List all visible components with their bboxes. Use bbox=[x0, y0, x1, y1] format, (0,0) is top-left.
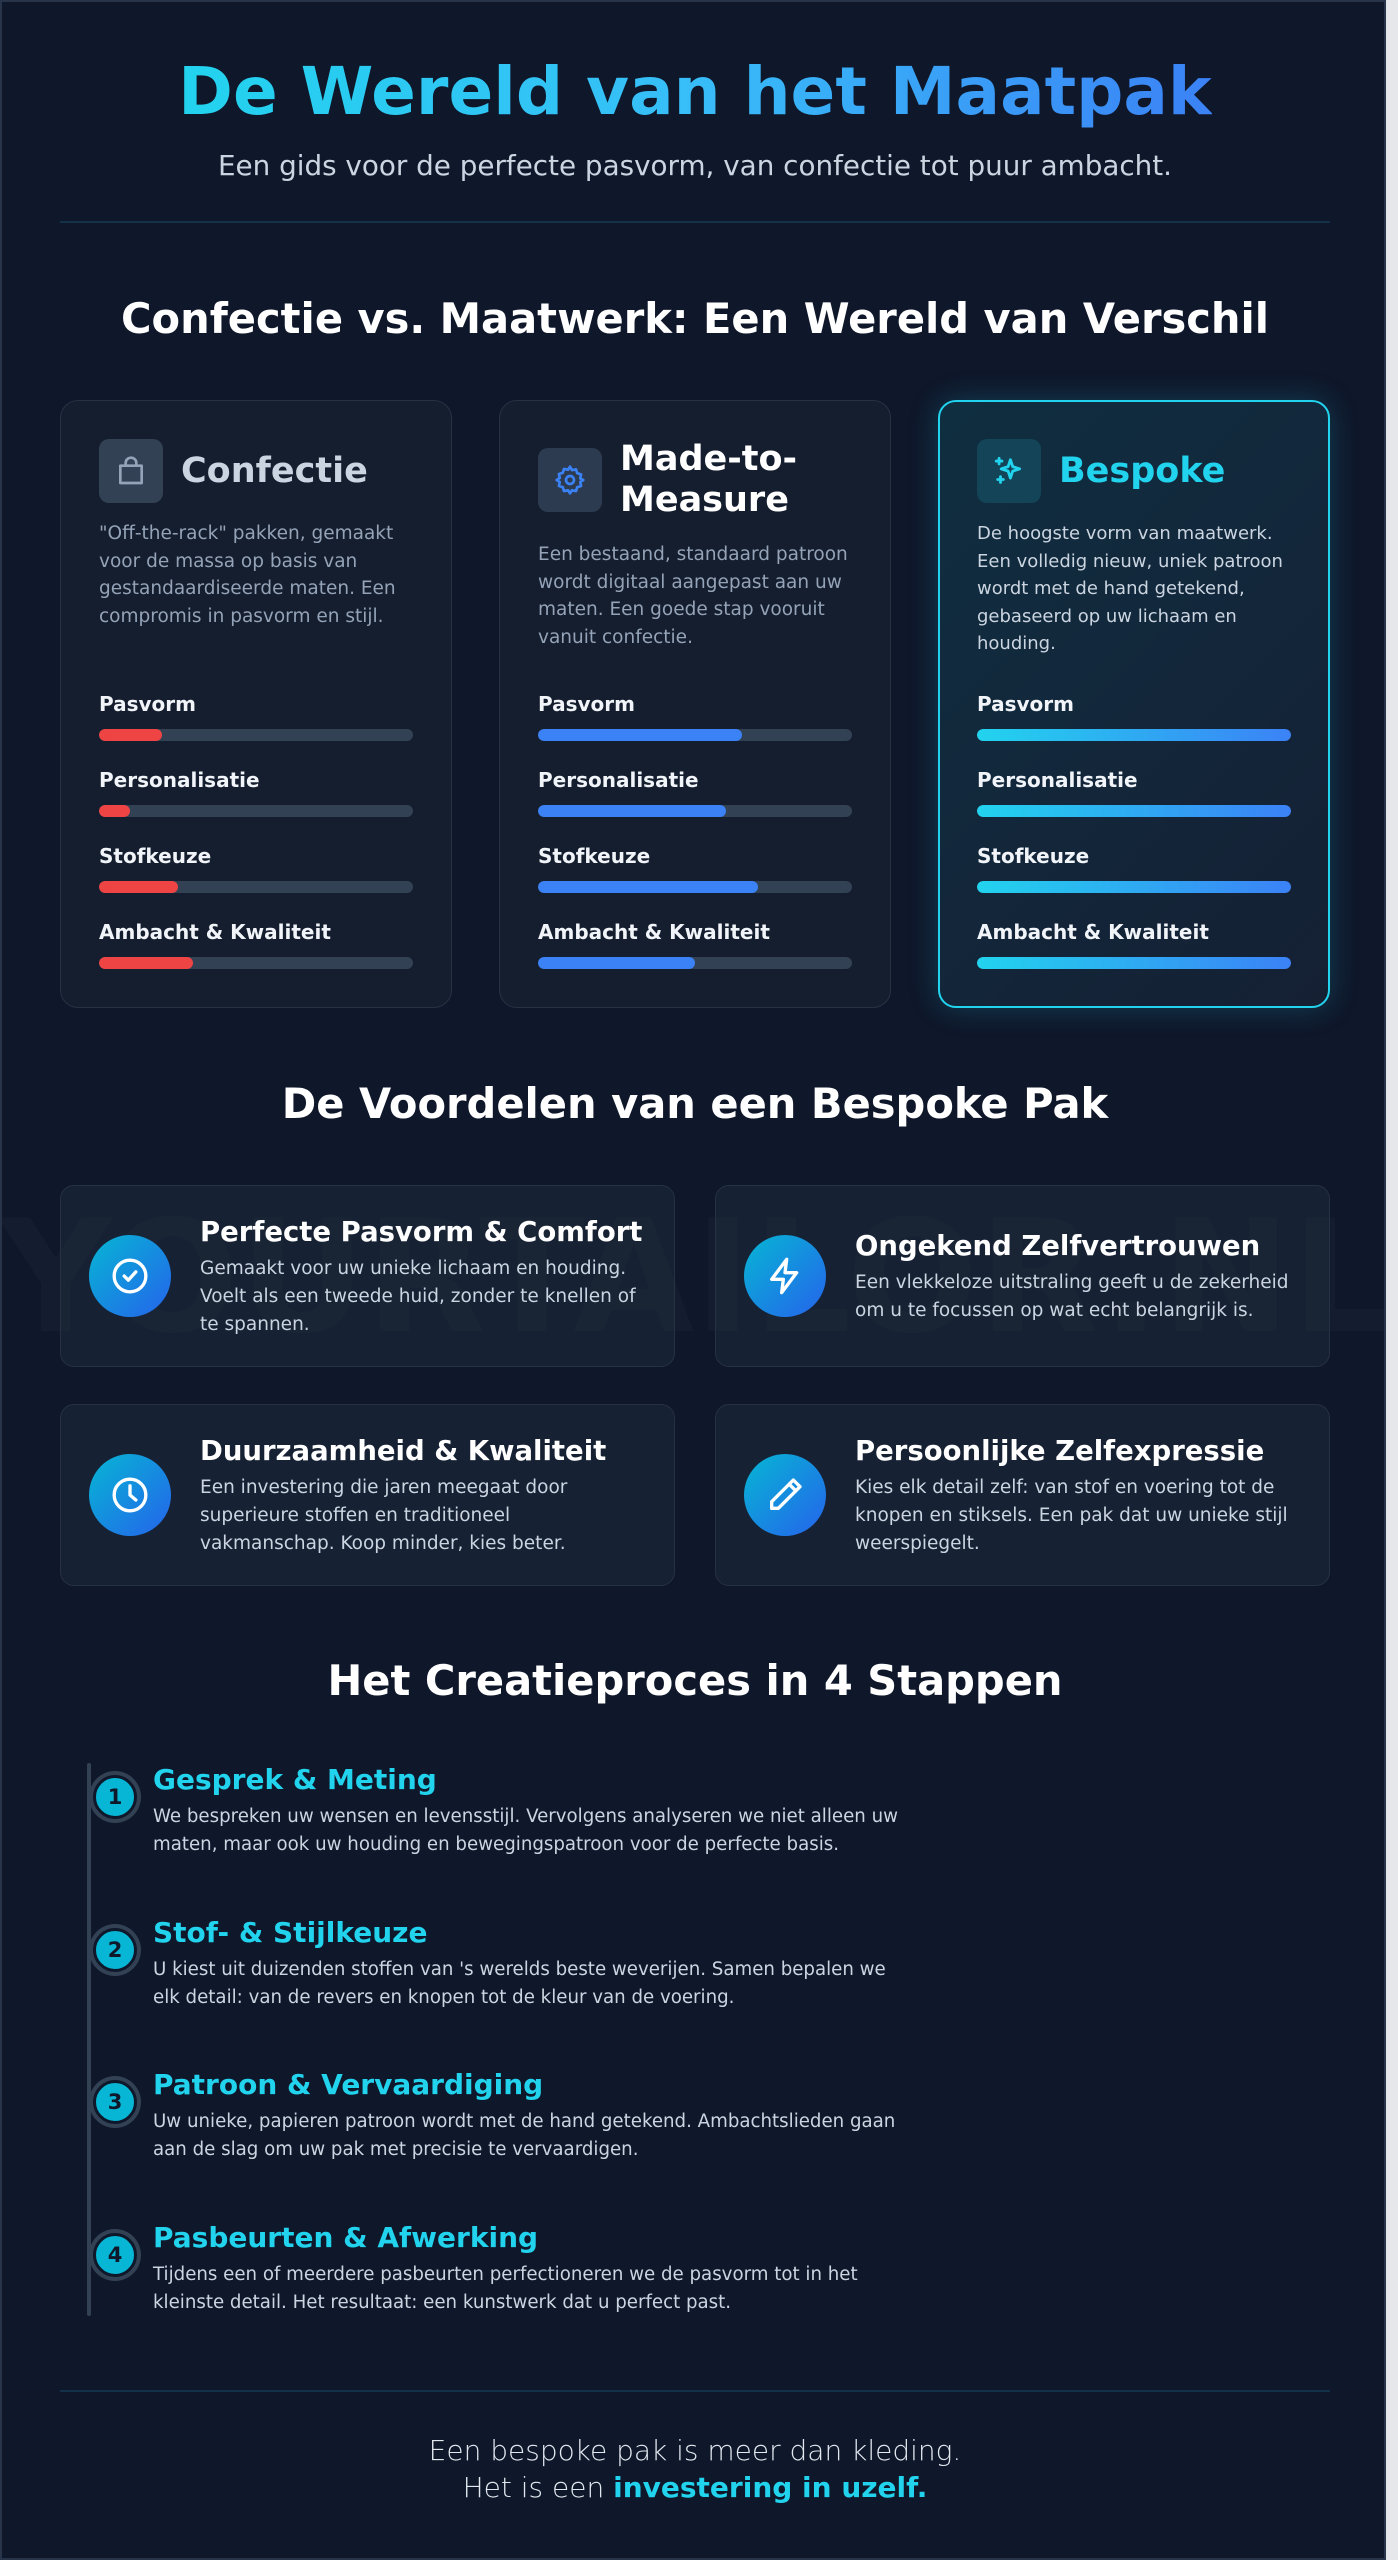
bars: made-to-measure: Stofkeuze bbox=[538, 844, 650, 868]
bars: bespoke: Stofkeuze bbox=[977, 844, 1089, 868]
bars: made-to-measure: Pasvorm bbox=[538, 692, 635, 716]
benefit: zelfexpressie bbox=[715, 1404, 1330, 1586]
icon: pencil bbox=[744, 1454, 826, 1536]
benefit: zelfvertrouwen bbox=[715, 1185, 1330, 1367]
description: made-to-measure: Een bestaand, standaard patroon wordt digitaal aangepast aan uw maten. Een goede stap vooruit vanuit confectie. bbox=[538, 544, 848, 648]
step marker 4 bbox=[89, 2229, 141, 2281]
heading: benefits: De Voordelen van een Bespoke Pak bbox=[282, 1079, 1108, 1128]
icon: clock bbox=[89, 1454, 171, 1536]
card header: confectie: Confectie bbox=[181, 450, 368, 490]
step marker 2: 2 bbox=[108, 1938, 122, 1962]
card header: made-to-measure: Made-to- bbox=[620, 439, 797, 479]
benefit: duurzaamheid: Een investering die jaren meegaat door superieure stoffen en traditioneel vakmanschap. Koop minder, kies beter. bbox=[200, 1476, 567, 1554]
description: confectie: "Off-the-rack" pakken, gemaakt voor de massa op basis van gestandaardiseerde maten. Een compromis in pasvorm en stijl. bbox=[99, 523, 396, 627]
step 3: Patroon & Vervaardiging bbox=[153, 2068, 543, 2101]
step 3: Uw unieke, papieren patroon wordt met de hand getekend. Ambachtslieden gaan aan de slag om uw pak met precisie te vervaardigen. bbox=[153, 2111, 895, 2160]
card header: made-to-measure: Measure bbox=[620, 480, 789, 520]
panel: made-to-measure bbox=[499, 400, 891, 1008]
step 1 bbox=[153, 1763, 898, 1855]
bars: bespoke: Ambacht & Kwaliteit bbox=[977, 920, 1209, 944]
bars: made-to-measure bbox=[538, 692, 852, 969]
step marker 1 bbox=[89, 1771, 141, 1823]
step 4 bbox=[152, 2221, 858, 2313]
benefit: duurzaamheid: Duurzaamheid & Kwaliteit bbox=[200, 1434, 606, 1466]
benefit: perfecte pasvorm: Perfecte Pasvorm & Comfort bbox=[200, 1216, 642, 1248]
step 2: Stof- & Stijlkeuze bbox=[153, 1916, 427, 1949]
card header: confectie bbox=[99, 439, 368, 503]
bars: bespoke: Personalisatie bbox=[977, 768, 1138, 792]
footer bbox=[429, 2434, 961, 2504]
card header: made-to-measure bbox=[538, 439, 797, 520]
step 1: We bespreken uw wensen en levensstijl. Vervolgens analyseren we niet alleen uw maten, maar ook uw houding en bewegingspatroon voor de perfecte basis. bbox=[153, 1806, 898, 1855]
bars: confectie: Stofkeuze bbox=[99, 844, 211, 868]
subtitle: Een gids voor de perfecte pasvorm, van confectie tot puur ambacht. bbox=[218, 149, 1172, 182]
bars: confectie bbox=[99, 692, 413, 969]
panel: bespoke bbox=[938, 400, 1330, 1008]
card header: bespoke bbox=[977, 439, 1225, 503]
benefit: duurzaamheid bbox=[60, 1404, 675, 1586]
bars: bespoke: Pasvorm bbox=[977, 692, 1074, 716]
bars: made-to-measure: Personalisatie bbox=[538, 768, 699, 792]
step 2: U kiest uit duizenden stoffen van 's werelds beste weverijen. Samen bepalen we elk detail: van de revers en knopen tot de kleur van de voering. bbox=[153, 1959, 886, 2008]
watermark: YOURTAILOR.NL bbox=[0, 1186, 1386, 1368]
description: bespoke: De hoogste vorm van maatwerk. Een volledig nieuw, uniek patroon wordt met de hand getekend, gebaseerd op uw lichaam en houding. bbox=[977, 523, 1283, 654]
icon: sparkles bbox=[977, 439, 1041, 503]
step 4: Tijdens een of meerdere pasbeurten perfectioneren we de pasvorm tot in het kleinste detail. Het resultaat: een kunstwerk dat u perfect past. bbox=[153, 2264, 858, 2313]
footer: Het is een investering in uzelf. bbox=[463, 2471, 927, 2504]
benefit: zelfexpressie: Persoonlijke Zelfexpressie bbox=[855, 1434, 1264, 1466]
icon: shopping bag bbox=[99, 439, 163, 503]
step marker 4: 4 bbox=[108, 2243, 122, 2267]
step marker 3 bbox=[89, 2076, 141, 2128]
benefit: perfecte pasvorm: Gemaakt voor uw unieke lichaam en houding. Voelt als een tweede huid, zonder te knellen of te spannen. bbox=[200, 1258, 636, 1334]
bars: confectie: Personalisatie bbox=[99, 768, 260, 792]
footer: Een bespoke pak is meer dan kleding. bbox=[429, 2434, 961, 2467]
icon: lightning bbox=[744, 1235, 826, 1317]
card header: bespoke: Bespoke bbox=[1059, 450, 1225, 490]
benefit: perfecte pasvorm bbox=[60, 1185, 675, 1367]
title: De Wereld van het Maatpak bbox=[178, 53, 1212, 130]
heading: process: Het Creatieproces in 4 Stappen bbox=[327, 1656, 1063, 1705]
benefit: zelfvertrouwen: Een vlekkeloze uitstraling geeft u de zekerheid om u te focussen op wat echt belangrijk is. bbox=[855, 1272, 1289, 1320]
benefit: zelfvertrouwen: Ongekend Zelfvertrouwen bbox=[855, 1230, 1260, 1262]
step marker 2 bbox=[89, 1924, 141, 1976]
heading: comparison: Confectie vs. Maatwerk: Een Wereld van Verschil bbox=[121, 294, 1269, 343]
step 4: Pasbeurten & Afwerking bbox=[153, 2221, 538, 2254]
panel: confectie bbox=[60, 400, 452, 1008]
step marker 3: 3 bbox=[108, 2090, 122, 2114]
step 1: Gesprek & Meting bbox=[153, 1763, 437, 1796]
benefit: zelfexpressie: Kies elk detail zelf: van stof en voering tot de knopen en stiksels. Een pak dat uw unieke stijl weerspiegelt. bbox=[855, 1476, 1288, 1554]
icon: gear bbox=[538, 448, 602, 512]
timeline line bbox=[87, 1763, 91, 2316]
bars: confectie: Ambacht & Kwaliteit bbox=[99, 920, 331, 944]
step 3 bbox=[153, 2068, 895, 2160]
step 2 bbox=[153, 1916, 886, 2008]
bars: bespoke bbox=[977, 692, 1291, 969]
bars: confectie: Pasvorm bbox=[99, 692, 196, 716]
bars: made-to-measure: Ambacht & Kwaliteit bbox=[538, 920, 770, 944]
step marker 1: 1 bbox=[108, 1785, 122, 1809]
icon: check circle bbox=[89, 1235, 171, 1317]
